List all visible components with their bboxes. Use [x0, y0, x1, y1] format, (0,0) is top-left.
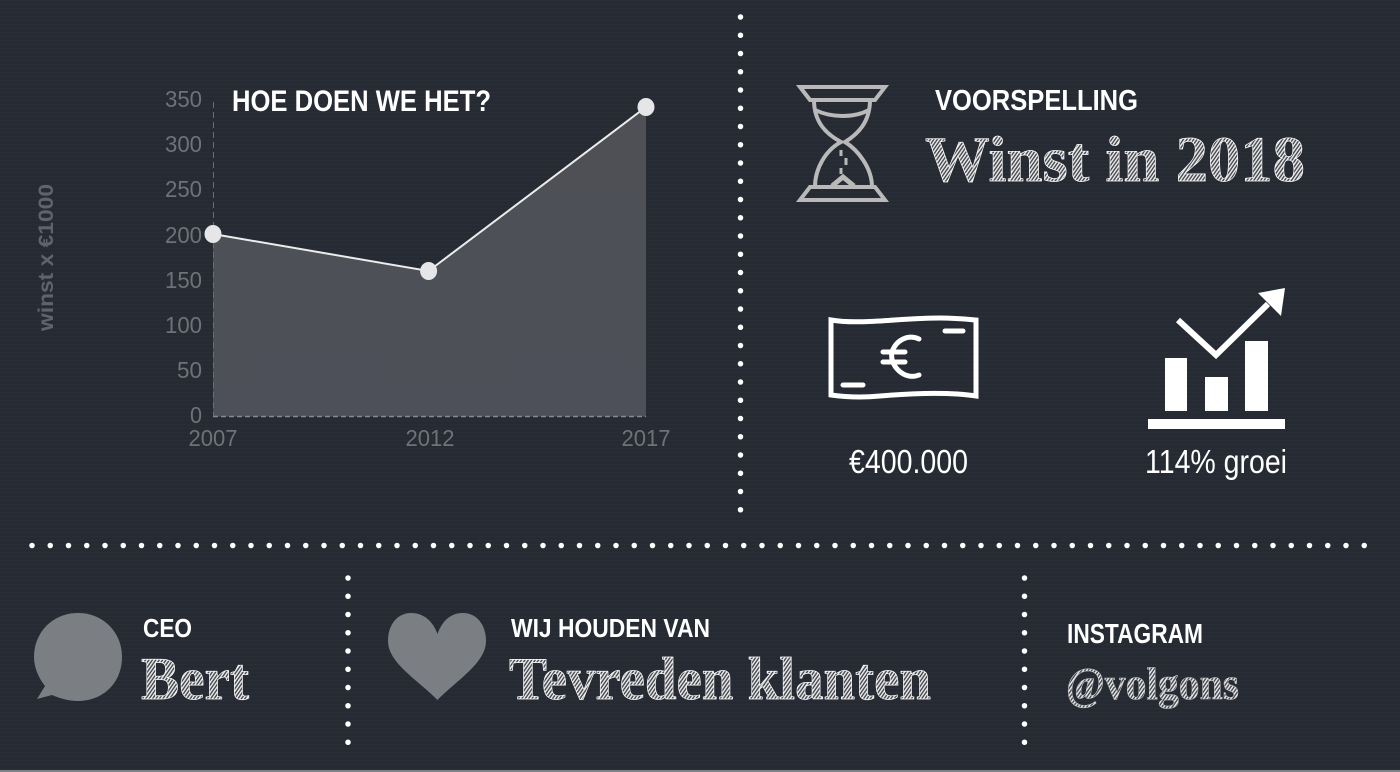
- icon: speech bubble: [34, 613, 122, 701]
- y axis labels: 250: [165, 176, 202, 202]
- panel: we love: [388, 613, 931, 712]
- x axis labels: 2017: [622, 425, 670, 451]
- y axis labels: 300: [165, 131, 202, 157]
- y axis labels: 200: [165, 222, 202, 248]
- panel: instagram: [1066, 618, 1239, 709]
- panel: profit chart: [35, 85, 670, 451]
- icon: hourglass: [800, 87, 885, 200]
- handle: @volgons: [1066, 658, 1239, 709]
- y axis labels: 150: [165, 267, 202, 293]
- text: Tevreden klanten: [509, 646, 931, 712]
- icon: banknote: [831, 318, 976, 397]
- line: [213, 107, 646, 271]
- axes: [213, 102, 646, 416]
- growth figure: 114% groei: [1145, 443, 1287, 480]
- y axis labels: [165, 86, 202, 428]
- icon: heart: [388, 613, 486, 700]
- panel: growth: [1145, 288, 1287, 480]
- name: Bert: [141, 646, 249, 712]
- panel: forecast: [800, 85, 1305, 200]
- y axis labels: 350: [165, 86, 202, 112]
- x axis labels: 2012: [406, 425, 454, 451]
- data points: [204, 98, 654, 280]
- heading: VOORSPELLING: [935, 85, 1138, 117]
- y axis labels: 100: [165, 312, 202, 338]
- heading: INSTAGRAM: [1067, 618, 1203, 649]
- y axis labels: 50: [177, 357, 202, 383]
- y axis title: winst x €1000: [35, 184, 58, 332]
- heading: CEO: [143, 613, 192, 643]
- amount: €400.000: [849, 443, 968, 480]
- area under the line: [213, 107, 646, 416]
- x axis labels: 2007: [188, 425, 238, 451]
- headline: Winst in 2018: [925, 124, 1305, 196]
- icon: growth chart: [1148, 288, 1285, 429]
- x axis labels: [188, 425, 670, 451]
- panel: forecast amount: [831, 318, 976, 480]
- panel: CEO: [34, 613, 249, 712]
- chart title: HOE DOEN WE HET?: [232, 85, 491, 118]
- y axis labels: 0: [190, 402, 202, 428]
- heading: WIJ HOUDEN VAN: [511, 613, 710, 643]
